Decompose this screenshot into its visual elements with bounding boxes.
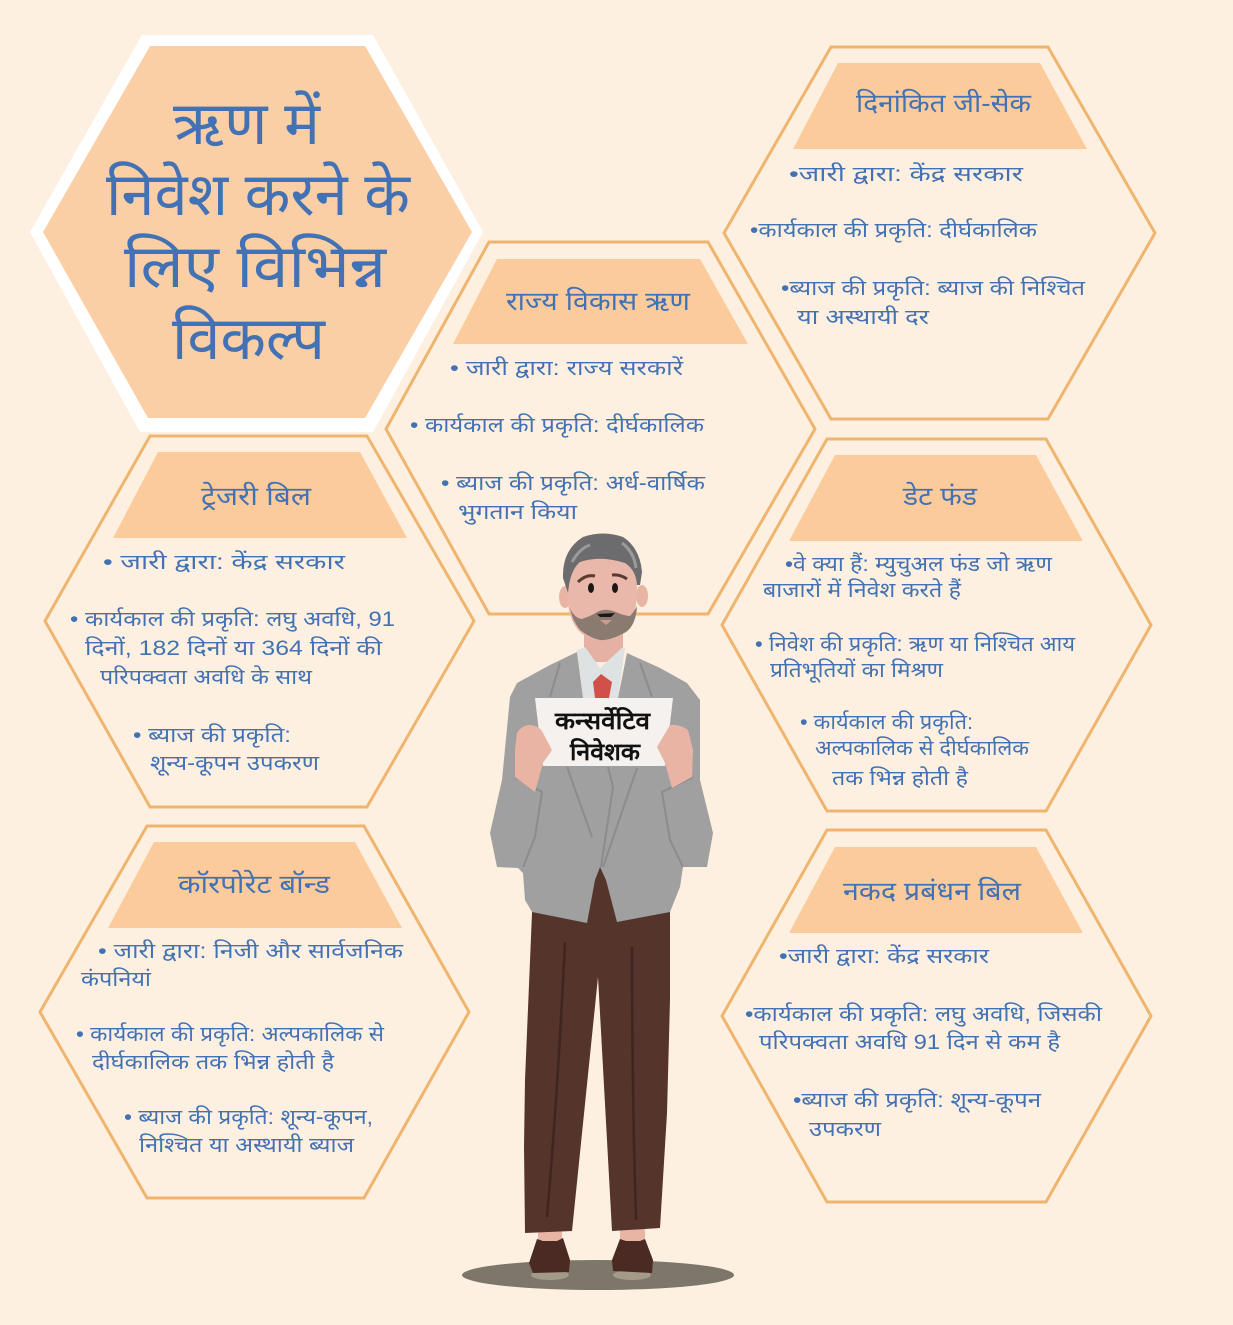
text block: debt fund details: तक भिन्न होती है xyxy=(832,766,969,790)
text block: treasury bill details xyxy=(70,550,395,776)
text block: cash management bill details: •ब्याज की प्रकृति: शून्य-कूपन xyxy=(793,1088,1041,1113)
icon: grey jacket xyxy=(490,652,713,923)
text block: dated G-Sec details: •कार्यकाल की प्रकृति: दीर्घकालिक xyxy=(750,218,1038,243)
icon: head with hair and beard xyxy=(559,534,648,640)
text block: corporate bond details: निश्चित या अस्थायी ब्याज xyxy=(139,1133,354,1157)
text block: state development loan details: • ब्याज की प्रकृति: अर्ध-वार्षिक xyxy=(441,471,706,496)
text block: cash management bill details: उपकरण xyxy=(809,1118,882,1141)
text block: debt fund details: अल्पकालिक से दीर्घकालिक xyxy=(815,736,1030,760)
title: लिए विभिन्न xyxy=(124,233,388,300)
heading: corporate bonds: कॉरपोरेट बॉन्ड xyxy=(178,869,331,899)
text block: treasury bill details: • ब्याज की प्रकृति: xyxy=(133,723,291,748)
panel: title hexagon xyxy=(30,35,483,432)
sign: conservative investor xyxy=(535,698,673,766)
heading: state development loans: राज्य विकास ऋण xyxy=(506,286,691,316)
heading: cash management bills: नकद प्रबंधन बिल xyxy=(843,876,1021,906)
text block: state development loan details: भुगतान किया xyxy=(458,500,578,525)
text block: corporate bond details xyxy=(76,939,404,1157)
text block: debt fund details: •वे क्या हैं: म्युचुअल फंड जो ऋण xyxy=(785,552,1053,577)
text block: corporate bond details: दीर्घकालिक तक भिन्न होती है xyxy=(92,1050,335,1074)
panel: debt funds xyxy=(722,439,1151,811)
title: निवेश करने के xyxy=(106,161,411,228)
icon: hands xyxy=(515,725,693,792)
panel: state development loans xyxy=(386,242,815,614)
panel: corporate bonds xyxy=(40,826,469,1198)
text block: dated G-Sec details: या अस्थायी दर xyxy=(797,305,929,329)
text block: corporate bond details: • जारी द्वारा: निजी और सार्वजनिक xyxy=(98,939,404,963)
text block: corporate bond details: • कार्यकाल की प्रकृति: अल्पकालिक से xyxy=(76,1022,385,1047)
icon: socks and shoes xyxy=(529,1220,653,1280)
text block: cash management bill details: •जारी द्वारा: केंद्र सरकार xyxy=(779,944,989,968)
text block: cash management bill details: परिपक्वता अवधि 91 दिन से कम है xyxy=(759,1030,1061,1054)
title: विकल्प xyxy=(172,305,326,372)
text block: debt fund details: • कार्यकाल की प्रकृति: xyxy=(800,710,973,735)
text block: treasury bill details: दिनों, 182 दिनों या 364 दिनों की xyxy=(85,636,383,660)
panel: dated G-Sec xyxy=(724,47,1155,419)
text block: debt fund details: बाजारों में निवेश करते हैं xyxy=(763,578,962,602)
text block: dated G-Sec details: •जारी द्वारा: केंद्र सरकार xyxy=(789,162,1024,186)
title: ऋण में xyxy=(173,90,321,157)
text block: debt fund details: • निवेश की प्रकृति: ऋण या निश्चित आय xyxy=(755,632,1076,657)
text block: debt fund details: प्रतिभूतियों का मिश्रण xyxy=(770,658,944,683)
text block: debt fund details xyxy=(755,552,1076,790)
text block: corporate bond details: • ब्याज की प्रकृति: शून्य-कूपन, xyxy=(124,1105,373,1130)
text block: dated G-Sec details xyxy=(750,162,1086,329)
title xyxy=(106,90,411,372)
text block: state development loan details xyxy=(410,356,706,525)
sign: conservative investor: निवेशक xyxy=(569,738,642,766)
text block: state development loan details: • कार्यकाल की प्रकृति: दीर्घकालिक xyxy=(410,413,705,438)
heading: treasury bills: ट्रेजरी बिल xyxy=(201,481,311,511)
text block: dated G-Sec details: •ब्याज की प्रकृति: ब्याज की निश्चित xyxy=(781,276,1086,301)
text block: treasury bill details: शून्य-कूपन उपकरण xyxy=(150,752,320,776)
heading: debt funds: डेट फंड xyxy=(902,481,978,511)
heading: dated G-Sec: दिनांकित जी-सेक xyxy=(856,88,1032,118)
text block: treasury bill details: • जारी द्वारा: केंद्र सरकार xyxy=(103,550,346,574)
icon: neck and collar xyxy=(577,622,625,698)
illustration: conservative investor figure xyxy=(462,534,734,1290)
panel: treasury bills xyxy=(45,436,474,807)
text block: treasury bill details: • कार्यकाल की प्रकृति: लघु अवधि, 91 xyxy=(70,607,395,632)
text block: cash management bill details xyxy=(745,944,1103,1141)
text block: cash management bill details: •कार्यकाल की प्रकृति: लघु अवधि, जिसकी xyxy=(745,1002,1103,1027)
sign: conservative investor: कन्सर्वेटिव xyxy=(554,707,652,735)
panel: cash management bills xyxy=(722,830,1151,1202)
text block: corporate bond details: कंपनियां xyxy=(81,967,152,991)
text block: state development loan details: • जारी द्वारा: राज्य सरकारें xyxy=(450,356,683,380)
icon: trousers xyxy=(524,866,670,1233)
text block: treasury bill details: परिपक्वता अवधि के साथ xyxy=(100,665,313,689)
